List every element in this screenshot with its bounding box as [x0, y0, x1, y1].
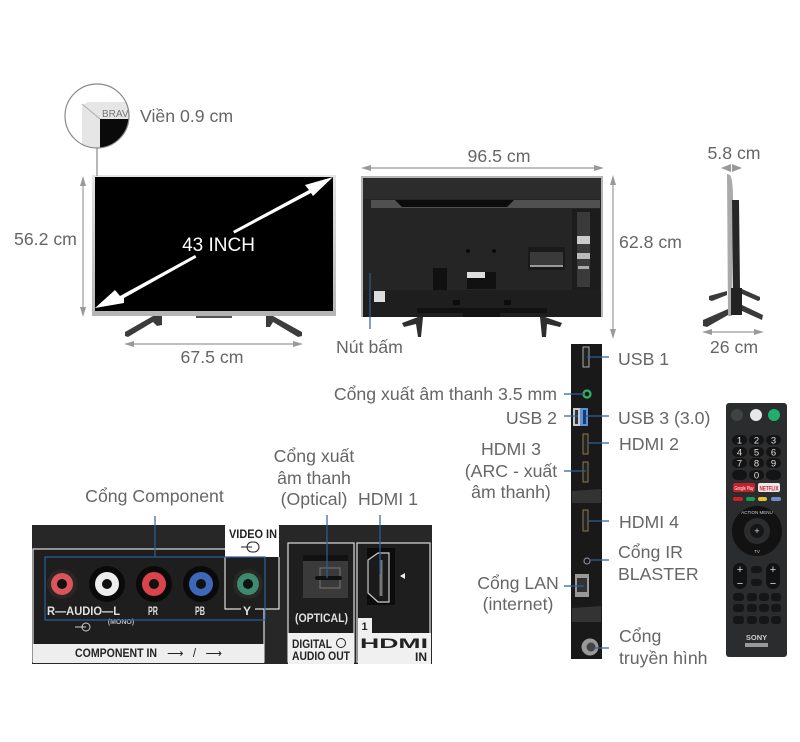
HDMI pointer: [379, 515, 381, 574]
component strip: [33, 644, 264, 663]
connector close-up panel: HDMI: [360, 635, 428, 651]
optical pointer: [326, 515, 328, 578]
remote control: −: [770, 578, 776, 590]
port pointer lines: [564, 357, 609, 648]
colour buttons: [733, 497, 743, 501]
label: optical: Cổng xuất: [274, 446, 354, 466]
remote control: −: [737, 578, 743, 590]
IR port: [584, 558, 590, 564]
remote control: 0: [754, 470, 759, 482]
port labels: USB 2: [506, 408, 557, 428]
connector close-up panel: COMPONENT IN: [75, 646, 157, 660]
dimension: front width: [124, 341, 303, 347]
back connector section: [572, 209, 600, 290]
port labels: Cổng: [619, 626, 661, 646]
dimension: back width: [361, 165, 604, 171]
connector close-up panel: DIGITAL: [292, 637, 332, 651]
remote control: Google Play: [734, 486, 754, 492]
optical section: [288, 543, 354, 662]
port labels: truyền hình: [619, 648, 708, 668]
diagonal arrow lower: [95, 255, 196, 308]
HDMI section: [357, 543, 430, 662]
remote control: +: [770, 564, 776, 576]
antenna port: [582, 638, 598, 656]
dimension: side depth: [721, 164, 742, 172]
jack labels: (MONO): [108, 619, 134, 626]
label: back width: 96.5 cm: [468, 146, 530, 166]
label: bezel width: Viền 0.9 cm: [140, 106, 233, 126]
Sony logo: SONY: [746, 633, 767, 642]
port labels: HDMI 2: [619, 434, 679, 454]
TV screen: [95, 177, 333, 311]
port labels: (ARC - xuất: [465, 461, 557, 481]
connector close-up panel: ⟶ / ⟶: [167, 648, 222, 660]
label: buttons: Nút bấm: [336, 337, 403, 357]
connector close-up panel: VIDEO IN: [229, 527, 277, 541]
label: optical: âm thanh: [277, 468, 351, 488]
remote control: 5: [754, 448, 759, 458]
side view TV: [703, 174, 763, 327]
remote control: [726, 403, 787, 657]
magnifier circle: BRAV: [102, 109, 129, 120]
dimension: back height: [610, 175, 616, 339]
label: optical: (Optical): [281, 489, 347, 509]
remote control: TV: [754, 549, 760, 554]
remote control: +: [754, 526, 760, 536]
connector close-up panel: [32, 525, 432, 664]
label: front height: 56.2 cm: [14, 229, 77, 249]
port labels: (internet): [483, 594, 553, 614]
jack labels: PR: [148, 604, 158, 618]
label: front width: 67.5 cm: [181, 347, 243, 367]
audio out port: [584, 390, 590, 398]
dimension: front height: [80, 176, 86, 317]
jack labels: R—AUDIO—L: [47, 604, 120, 618]
playback buttons: [733, 593, 781, 624]
port labels: BLASTER: [618, 564, 699, 584]
remote control: 6: [771, 448, 776, 458]
back TV: [361, 176, 603, 337]
HDMI 2: [583, 434, 588, 454]
remote control: 7: [737, 458, 742, 470]
back panel: [363, 178, 601, 317]
TV stand feet: [125, 316, 302, 337]
connector line: [96, 146, 98, 176]
connector close-up panel: AUDIO OUT: [292, 649, 351, 663]
port labels: Cổng LAN: [477, 573, 559, 593]
port labels: Cổng xuất âm thanh 3.5 mm: [334, 384, 557, 404]
connector close-up panel: (OPTICAL): [295, 611, 348, 625]
connector close-up panel: 1: [361, 621, 368, 633]
remote control: NETFLIX: [760, 486, 779, 492]
volume and program rockers: [733, 563, 747, 589]
port labels: HDMI 4: [619, 512, 679, 532]
screen size label: 43 INCH: [182, 235, 255, 256]
side body: [727, 174, 733, 316]
label: side depth: 5.8 cm: [707, 143, 761, 163]
lower housing: [363, 290, 601, 317]
number pad: [732, 435, 781, 480]
label: component: Cổng Component: [85, 486, 224, 506]
USB 1: [583, 347, 589, 367]
back button pointer: [369, 273, 371, 329]
remote control: +: [737, 564, 743, 576]
video in tab: [225, 525, 279, 557]
port labels: USB 3 (3.0): [618, 408, 710, 428]
remote control: 1: [737, 436, 742, 446]
remote control: ACTION MENU: [741, 510, 773, 515]
remote control: 3: [771, 436, 776, 446]
component bracket: [45, 516, 265, 620]
divider notch: [572, 606, 601, 622]
dimension: side width: [702, 329, 764, 335]
back stand feet: [402, 317, 562, 337]
remote control: 2: [754, 436, 759, 446]
port labels: HDMI 3: [481, 439, 541, 459]
video in box: [225, 557, 279, 609]
port labels: [334, 349, 710, 668]
HDMI 3: [583, 462, 588, 482]
Google Play and Netflix buttons: [733, 483, 755, 492]
top buttons: [731, 409, 743, 421]
component section: [33, 549, 264, 662]
front TV: [92, 175, 336, 337]
connector close-up panel: IN: [415, 650, 427, 664]
TV frame: [92, 175, 336, 316]
jack labels: [47, 604, 251, 631]
HDMI 4: [583, 510, 588, 531]
mount holes and label sticker: [466, 249, 470, 253]
port labels: USB 1: [618, 349, 669, 369]
remote control: 9: [771, 458, 776, 470]
USB 2 and USB 3 ports: [573, 408, 580, 426]
label: stand depth: 26 cm: [710, 337, 758, 357]
jack labels: Y: [243, 604, 251, 618]
divider notch: [572, 489, 601, 503]
port labels: Cổng IR: [618, 542, 683, 562]
port labels: âm thanh): [471, 482, 551, 502]
bezel zoom callout: [64, 83, 130, 176]
side port panel: [571, 344, 602, 659]
navigation ring: [732, 506, 782, 556]
LAN port: [575, 574, 589, 597]
label: back height: 62.8 cm: [619, 232, 682, 252]
diagonal arrow upper: [233, 177, 333, 234]
RCA jacks: [47, 566, 263, 602]
remote control: 4: [737, 448, 742, 458]
jack labels: PB: [195, 604, 205, 618]
remote control: 8: [754, 458, 759, 470]
label: optical: [274, 446, 354, 509]
label: HDMI 1: HDMI 1: [358, 489, 418, 509]
side feet: [703, 289, 763, 327]
back silver frame: [361, 176, 603, 317]
